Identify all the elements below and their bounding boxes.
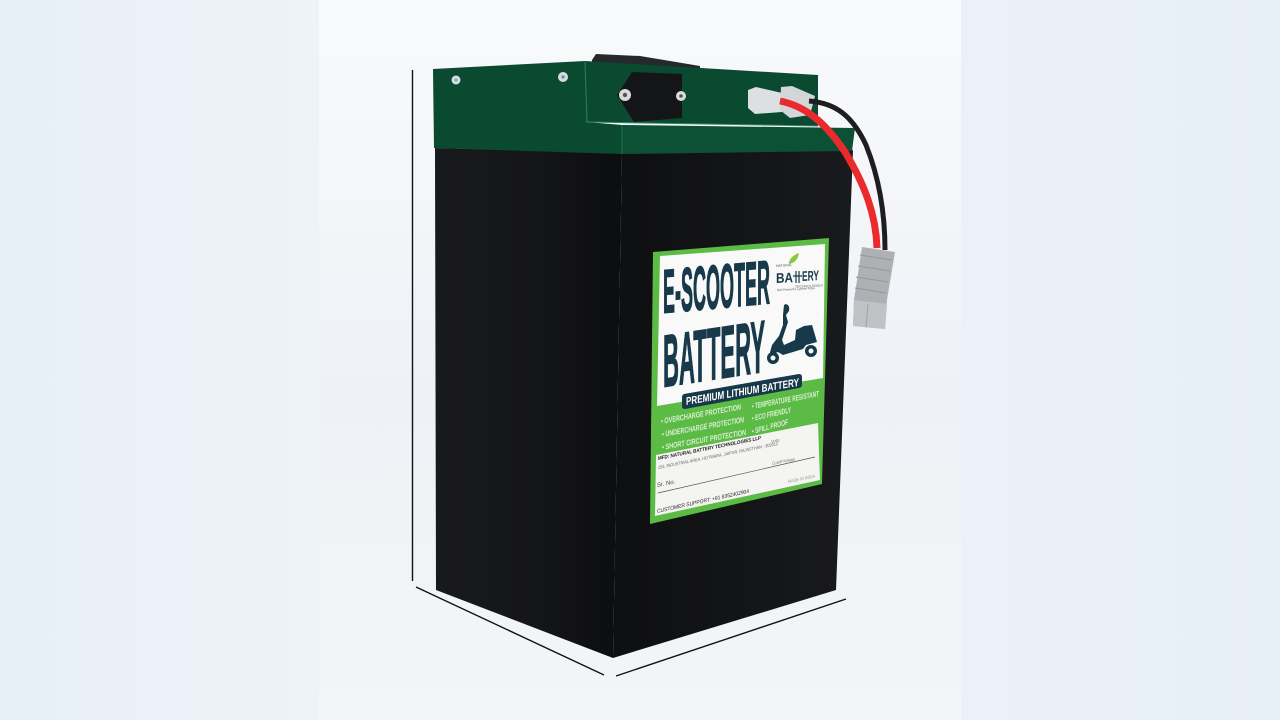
dimension line: height	[412, 70, 414, 581]
banner: premium lithium battery	[682, 374, 802, 409]
feature list: qualities: • ECO FRIENDLY	[752, 405, 791, 423]
banner: premium lithium battery: PREMIUM LITHIUM BATTERY	[686, 377, 799, 408]
centre socket	[617, 72, 682, 122]
background: right panel	[961, 0, 1280, 720]
screw	[558, 72, 568, 82]
rear bracket	[592, 54, 700, 72]
logo: Natural Battery	[776, 253, 823, 292]
screw	[676, 91, 686, 101]
feature list: protections: • SHORT CIRCUIT PROTECTION	[662, 428, 746, 452]
manufacturer details: Volts	[771, 437, 780, 444]
screw	[619, 89, 631, 101]
text: E-SCOOTER	[663, 248, 770, 327]
logo: Natural Battery: NATURAL	[776, 263, 792, 268]
label: green border	[650, 238, 829, 524]
manufacturer details: MADE IN INDIA	[788, 473, 816, 484]
manufacturer details: MFD: NATURAL BATTERY TECHNOLOGIES LLP	[658, 435, 762, 462]
background: centre photo area	[319, 0, 961, 720]
manufacturer details: CUSTOMER SUPPORT: +91 8352402904	[657, 489, 749, 515]
manufacturer details: Cutoff Voltage	[772, 456, 795, 466]
battery body: left face	[435, 148, 622, 658]
feature list: protections: • OVERCHARGE PROTECTION	[661, 403, 741, 426]
background: left panel	[0, 0, 319, 720]
manufacturer details: Sr. No.	[657, 479, 676, 489]
manufacturer details: 153, INDUSTRIAL AREA, HOTWARA, JAIPUR, RAJASTHAN - 302012	[658, 441, 778, 470]
gland: black cable	[780, 86, 815, 118]
feature list: qualities	[752, 389, 819, 436]
text: BATTERY	[663, 305, 765, 403]
logo leaf	[789, 253, 799, 264]
red cable	[780, 101, 877, 248]
dimension line: depth	[416, 587, 604, 675]
screw	[452, 76, 460, 84]
lid: recessed right panel	[585, 61, 818, 126]
feature list: qualities: • TEMPERATURE RESISTANT	[752, 389, 819, 411]
logo: Natural Battery: BA	[776, 269, 793, 286]
lid: left face	[433, 61, 622, 154]
feature list: protections: • UNDERCHARGE PROTECTION	[662, 415, 744, 439]
label: white lower panel	[655, 423, 820, 516]
feature list: qualities: • SPILL PROOF	[752, 418, 788, 436]
black cable	[809, 101, 885, 250]
battery	[433, 54, 895, 658]
Anderson connector	[853, 247, 895, 329]
logo: Natural Battery: TECHNOLOGIES	[795, 284, 823, 289]
dimension line: width	[616, 599, 846, 676]
logo: Natural Battery: ERY	[802, 267, 819, 284]
gland: red cable	[748, 87, 782, 114]
battery body: right face	[613, 150, 853, 658]
feature list: protections	[661, 403, 746, 452]
lid: lower lip	[622, 125, 855, 154]
product label	[650, 238, 829, 524]
icon: scooter	[767, 304, 817, 364]
logo: Natural Battery: Spirit Powered for a greener Future	[777, 286, 815, 292]
manufacturer details	[657, 435, 816, 515]
label: white upper panel	[657, 244, 825, 406]
